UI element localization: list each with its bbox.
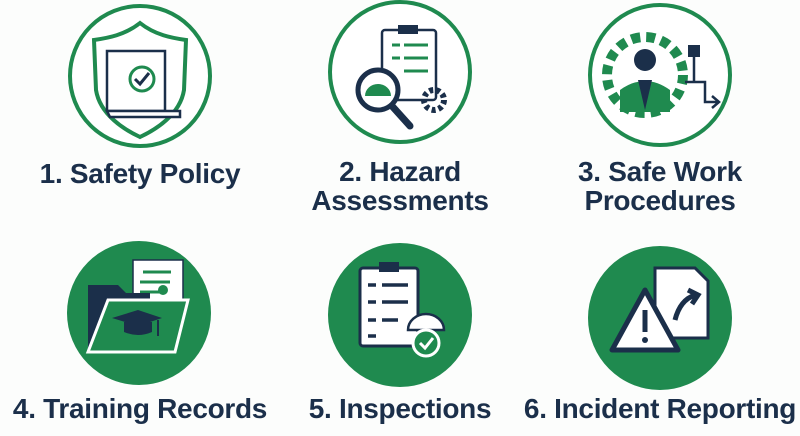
label 5: 5. Inspections <box>309 393 491 424</box>
label 2: Assessments <box>311 185 489 216</box>
label 3: Procedures <box>584 185 736 216</box>
icon: incident reporting <box>588 246 732 390</box>
label 1: 1. Safety Policy <box>40 158 240 189</box>
icon: safe work procedures <box>590 5 730 145</box>
label 2: 2. Hazard <box>339 156 461 187</box>
label 3 <box>578 156 742 216</box>
label 6: 6. Incident Reporting <box>524 393 796 424</box>
icon: inspections <box>328 243 472 387</box>
icon: hazard assessments <box>330 2 470 142</box>
icon: training records <box>67 241 211 385</box>
label 2 <box>311 156 489 216</box>
icon: safety policy <box>70 6 210 146</box>
label 4: 4. Training Records <box>13 393 267 424</box>
label 3: 3. Safe Work <box>578 156 742 187</box>
